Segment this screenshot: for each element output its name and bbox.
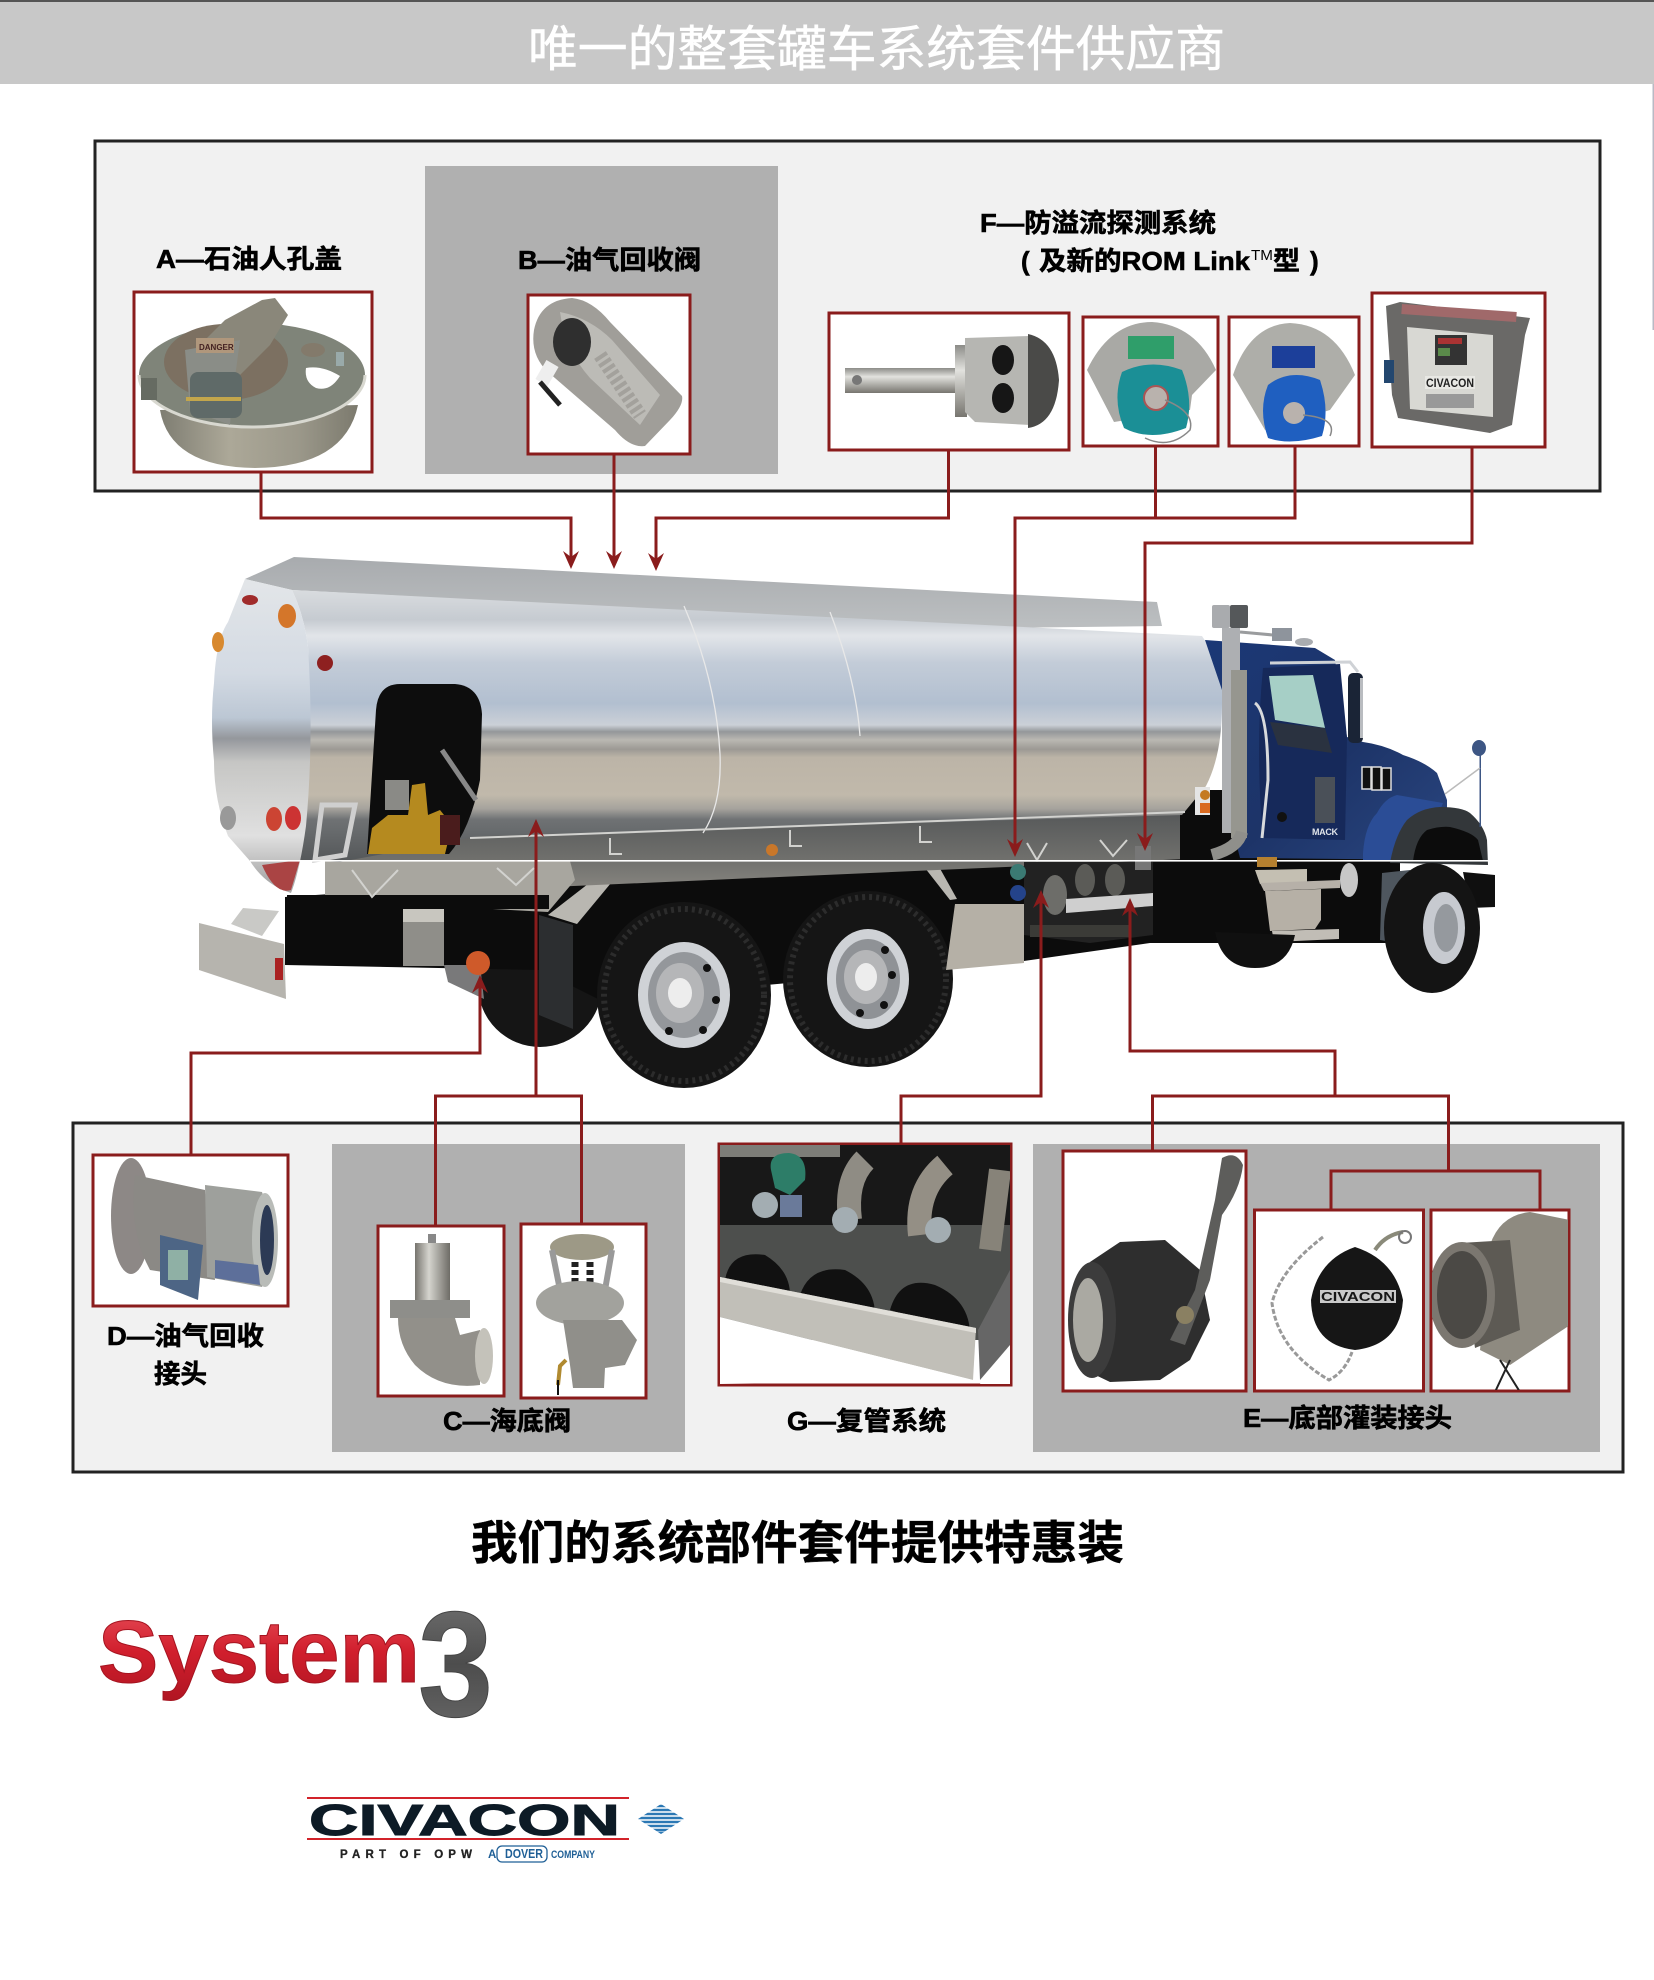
product A: manhole cover: DANGER xyxy=(199,343,234,352)
product C1: elbow valve xyxy=(378,1226,504,1396)
frame under tank xyxy=(325,800,1186,897)
mud flap xyxy=(539,915,573,1029)
product F4: ROM Link box xyxy=(1372,293,1545,447)
tail lights xyxy=(212,595,333,891)
product F1: probe xyxy=(829,313,1069,450)
connector: A to tank xyxy=(261,472,579,569)
heading: D: D—油气回收 xyxy=(107,1321,264,1351)
panel: C grey background xyxy=(332,1144,685,1452)
heading: F: ( xyxy=(1021,246,1030,276)
logo: System3: System xyxy=(98,1602,420,1701)
offer heading: 我们的系统部件套件提供特惠装 xyxy=(471,1517,1124,1569)
tank cabinet opening xyxy=(367,684,482,854)
front wheel xyxy=(1380,863,1495,993)
heading: D xyxy=(107,1321,264,1389)
heading: F: 型 xyxy=(1273,246,1300,276)
logo: Civacon: A xyxy=(488,1849,496,1861)
connector: E to truck xyxy=(1122,898,1540,1210)
product E3: coupler adaptor xyxy=(1429,1210,1570,1392)
product E1: adaptor with handle xyxy=(1063,1151,1246,1391)
connector: B to tank xyxy=(606,454,622,569)
heading: E: E—底部灌装接头 xyxy=(1243,1403,1452,1433)
heading: A: A—石油人孔盖 xyxy=(156,244,342,274)
rear equipment box xyxy=(403,908,484,999)
logo: Civacon xyxy=(307,1796,684,1862)
product E2: dust cap with chain: CIVACON xyxy=(1321,1289,1395,1304)
heading: F: F—防溢流探测系统 xyxy=(980,208,1216,238)
logo: Civacon: COMPANY xyxy=(551,1849,596,1861)
logo: System3 xyxy=(98,1580,493,1748)
connector: F2 and F3 to truck xyxy=(1007,446,1295,857)
heading: G: G—复管系统 xyxy=(787,1406,946,1436)
product F4: ROM Link box: CIVACON xyxy=(1426,376,1474,390)
side amber marker xyxy=(766,844,778,856)
product E2: dust cap with chain xyxy=(1254,1210,1424,1391)
header band xyxy=(0,0,1654,84)
chassis xyxy=(285,858,1400,1000)
heading: D: 接头 xyxy=(154,1359,207,1389)
product F2: green sensor xyxy=(1083,317,1218,446)
connector: D to truck xyxy=(191,975,488,1155)
tank rear head xyxy=(212,579,311,893)
product B: vent valve xyxy=(528,295,690,454)
heading: F: TM xyxy=(1251,247,1273,264)
product C2: bottom valve xyxy=(521,1224,646,1398)
tool box xyxy=(946,904,1024,970)
tank body xyxy=(292,590,1223,862)
logo: Civacon: CIVACON xyxy=(309,1796,620,1845)
heading: F xyxy=(980,208,1319,276)
tank-end lamp fitting xyxy=(1195,787,1210,815)
heading: B: B—油气回收阀 xyxy=(518,245,701,275)
exhaust stack xyxy=(1212,605,1248,855)
heading: F: ) xyxy=(1310,246,1319,276)
black behind cab gap xyxy=(1180,790,1240,860)
fender xyxy=(548,856,957,924)
heading: F: 及新的ROM Link xyxy=(1039,246,1251,276)
icon: blue diamond xyxy=(638,1804,684,1834)
title: 唯一的整套罐车系统套件供应商 xyxy=(528,23,1225,77)
connector: G to truck xyxy=(901,890,1049,1144)
cab: MACK xyxy=(1312,827,1338,837)
rear-most tyre behind equipment xyxy=(478,923,602,1047)
logo: Civacon: PART OF OPW xyxy=(340,1849,472,1861)
product F3: blue sensor xyxy=(1229,317,1359,446)
antenna ball xyxy=(1445,740,1486,827)
rear tandem wheels xyxy=(597,891,953,1088)
panel: bottom components xyxy=(73,1123,1623,1472)
connector: C to tank xyxy=(436,819,582,1225)
rear bumper plate xyxy=(199,908,286,999)
product G: manifold photo xyxy=(719,1144,1011,1385)
connector: F4 to truck xyxy=(1137,447,1472,851)
reflection line across truck xyxy=(250,860,1488,862)
under-cab steps xyxy=(1255,857,1358,942)
heading: C: C—海底阀 xyxy=(443,1406,571,1436)
under-tank rail and brackets xyxy=(352,812,1185,897)
truck xyxy=(199,557,1495,1088)
mid drive wheel xyxy=(1215,932,1295,968)
catwalk panel xyxy=(245,557,1162,628)
front fender flare xyxy=(1390,807,1488,865)
logo: System3: 3 xyxy=(418,1580,493,1748)
connector: F1 to tank xyxy=(648,450,948,571)
logo: Civacon: DOVER xyxy=(505,1847,543,1861)
panel: B grey background xyxy=(425,166,778,474)
panel: top components xyxy=(95,141,1600,491)
product D: vapor coupler xyxy=(93,1155,288,1306)
cab xyxy=(1205,628,1488,865)
rear ladder xyxy=(315,805,355,860)
product A: manhole cover xyxy=(134,292,372,472)
orange coupler xyxy=(466,951,490,975)
valve assembly xyxy=(1010,846,1153,943)
